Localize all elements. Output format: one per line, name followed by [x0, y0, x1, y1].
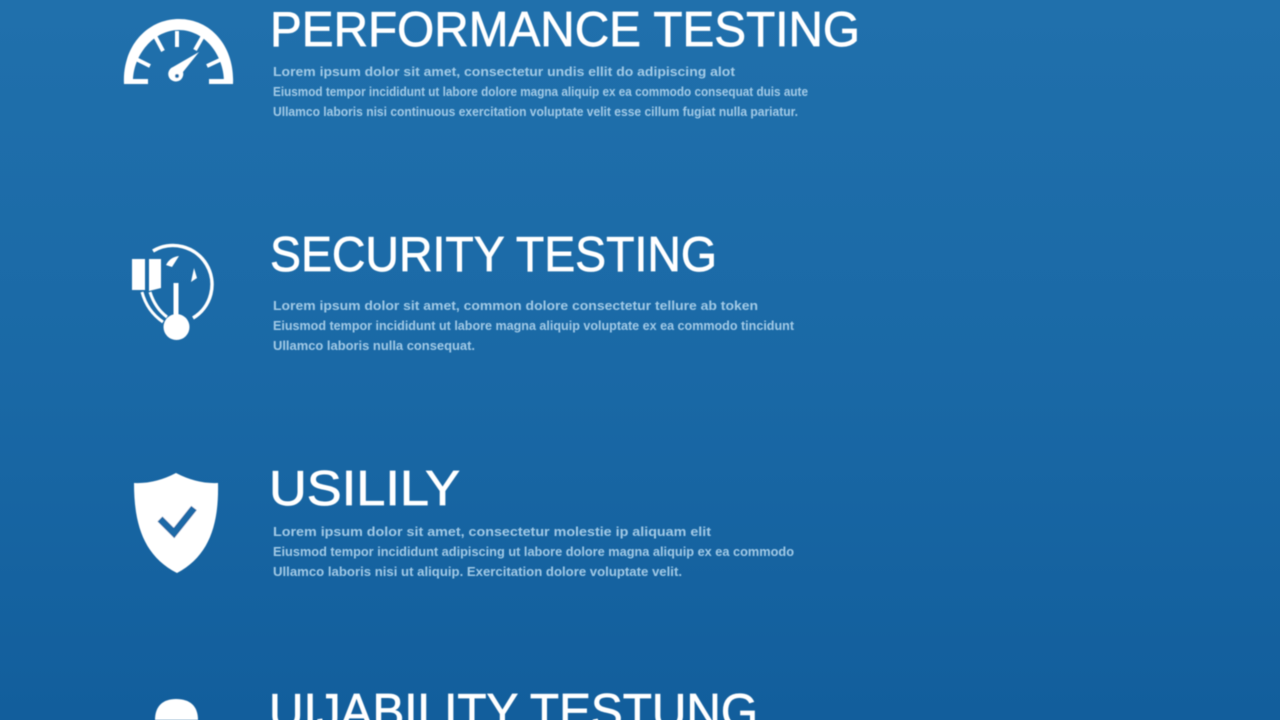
text block: performance description: Lorem ipsum dolor sit amet, consectetur undis ellit do adipiscing alot [273, 65, 736, 79]
text block: usability description: Eiusmod tempor incididunt adipiscing ut labore dolore magna aliquip ex ea commodo [273, 545, 794, 559]
panel: performance testing [124, 3, 860, 119]
heading: usability: USILILY [269, 462, 460, 516]
text block: security description: Lorem ipsum dolor sit amet, common dolore consectetur tellure ab token [273, 299, 758, 313]
panel: usability [134, 462, 794, 579]
text block: performance description [273, 65, 808, 119]
icon: partial rounded shape [155, 699, 198, 720]
icon: security gauge with pin [132, 245, 212, 340]
text block: security description: Eiusmod tempor incididunt ut labore magna aliquip voluptate ex ea commodo tincidunt [273, 319, 795, 333]
heading: security testing: SECURITY TESTING [270, 228, 717, 282]
icon: speedometer gauge [124, 19, 233, 84]
text block: usability description: Ullamco laboris nisi ut aliquip. Exercitation dolore voluptate velit. [273, 565, 682, 579]
text block: performance description: Ullamco laboris nisi continuous exercitation voluptate velit esse cillum fugiat nulla pariatur. [273, 105, 798, 119]
panel: reliability testing [155, 685, 758, 720]
text block: performance description: Eiusmod tempor incididunt ut labore dolore magna aliquip ex ea commodo consequat duis aute [273, 85, 808, 99]
text block: security description: Ullamco laboris nulla consequat. [273, 339, 475, 353]
text block: usability description [273, 525, 794, 579]
panel: security testing [132, 228, 795, 353]
text block: security description [273, 299, 795, 353]
icon: shield with check [134, 473, 218, 573]
heading: performance testing: PERFORMANCE TESTING [270, 3, 860, 57]
text block: usability description: Lorem ipsum dolor sit amet, consectetur molestie ip aliquam elit [273, 525, 712, 539]
